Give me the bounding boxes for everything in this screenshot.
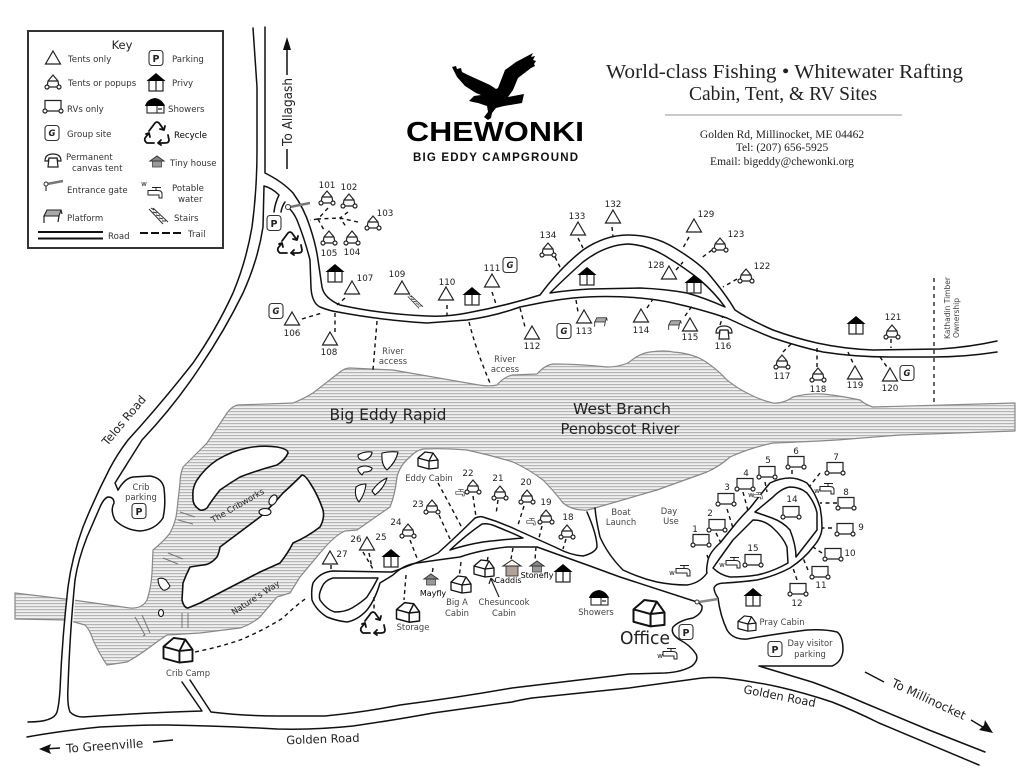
big A cabin bbox=[445, 562, 471, 618]
site 120: 120 bbox=[882, 384, 899, 394]
key: potable water: w bbox=[141, 180, 147, 188]
icon: recycle north bbox=[278, 232, 302, 255]
crib parking: Crib bbox=[133, 482, 149, 492]
caddis tiny house: Caddis bbox=[494, 576, 522, 585]
site 115: 115 bbox=[682, 333, 698, 343]
site 26 bbox=[350, 535, 374, 569]
key: stairs bbox=[149, 208, 199, 224]
site 112 bbox=[520, 308, 540, 352]
big A cabin: Big A bbox=[446, 597, 468, 607]
road label: Telos Road: Telos Road bbox=[98, 393, 149, 449]
chesuncook cabin: Cabin bbox=[492, 608, 516, 618]
site 10 bbox=[813, 547, 856, 561]
site 128 bbox=[648, 261, 683, 279]
key: platform: Platform bbox=[67, 214, 103, 224]
site 119: 119 bbox=[847, 381, 863, 391]
site 109: 109 bbox=[389, 270, 405, 280]
site 27 bbox=[322, 550, 348, 569]
site 6: 6 bbox=[793, 447, 799, 457]
chesuncook cabin: Chesuncook bbox=[478, 597, 530, 607]
day visitor parking: parking bbox=[794, 649, 826, 659]
site 4: 4 bbox=[743, 469, 749, 479]
site 6 bbox=[786, 447, 806, 477]
key: privy: Privy bbox=[172, 79, 193, 89]
privy loop east bbox=[684, 275, 704, 293]
arrow: to Millinocket bbox=[865, 672, 993, 733]
site 103: 103 bbox=[377, 209, 393, 219]
trail: river access west: River bbox=[382, 346, 404, 356]
campground name: BIG EDDY CAMPGROUND bbox=[413, 152, 578, 164]
site 110: 110 bbox=[439, 278, 456, 288]
site 5 bbox=[757, 456, 777, 492]
arrow: to Greenville: To Greenville bbox=[65, 736, 144, 756]
road label: Golden Road west: Golden Road bbox=[286, 731, 360, 747]
key: stairs: Stairs bbox=[174, 214, 199, 224]
key: RVs only bbox=[43, 100, 104, 115]
heading: tagline: Cabin, Tent, & RV Sites bbox=[689, 84, 877, 105]
site 134: 134 bbox=[540, 231, 557, 241]
crib parking bbox=[125, 482, 157, 518]
site 123: 123 bbox=[728, 230, 744, 240]
site 20 bbox=[518, 478, 535, 525]
contact details: Tel: (207) 656-5925 bbox=[736, 142, 828, 154]
eddy cabin: Eddy Cabin bbox=[405, 473, 453, 483]
mayfly tiny house bbox=[420, 568, 446, 598]
trail: river access west bbox=[373, 321, 407, 370]
arrow: to Allagash: To Allagash bbox=[281, 78, 296, 147]
key: road bbox=[38, 232, 130, 242]
day visitor parking: Day visitor bbox=[787, 638, 833, 648]
privy office side bbox=[744, 588, 762, 606]
heading: tagline: World-class Fishing • Whitewater Rafting bbox=[606, 62, 963, 83]
label: day use bbox=[661, 506, 679, 526]
stonefly tiny house: Stonefly bbox=[521, 571, 554, 580]
site 19 bbox=[527, 498, 554, 538]
label: boat launch: Boat bbox=[611, 507, 631, 517]
site 134 bbox=[540, 231, 560, 267]
site 102: 102 bbox=[341, 183, 357, 193]
site 118: 118 bbox=[810, 385, 826, 395]
water taps east: w bbox=[669, 569, 675, 577]
site 114: 114 bbox=[633, 326, 650, 336]
key: tents only bbox=[46, 51, 111, 65]
site 22: 22 bbox=[462, 469, 474, 479]
site 107 bbox=[337, 274, 373, 305]
key: recycle bbox=[145, 122, 207, 145]
entrance gate and north parking bbox=[267, 203, 310, 230]
site 1: 1 bbox=[692, 525, 698, 535]
road label: Golden Road east: Golden Road bbox=[742, 682, 817, 710]
privy south bbox=[554, 564, 572, 582]
trail: river access east bbox=[469, 322, 519, 383]
site 7 bbox=[809, 453, 845, 487]
label: day use: Day bbox=[661, 506, 677, 516]
site 7: 7 bbox=[833, 453, 839, 463]
site 5: 5 bbox=[765, 456, 771, 466]
trail: river access east: access bbox=[491, 364, 519, 374]
island: The Cribworks bbox=[193, 446, 288, 510]
key: entrance gate bbox=[44, 181, 128, 196]
site 122 bbox=[723, 262, 770, 287]
site 107: 107 bbox=[357, 274, 373, 284]
site 129: 129 bbox=[698, 210, 714, 220]
site 106: G bbox=[273, 307, 280, 317]
trail: river access east: River bbox=[494, 354, 516, 364]
site 122: 122 bbox=[754, 262, 770, 272]
eddy cabin bbox=[405, 452, 462, 528]
storage: Storage bbox=[397, 622, 429, 632]
site 21: 21 bbox=[492, 474, 504, 484]
site 113: G bbox=[561, 327, 568, 337]
key: entrance gate: Entrance gate bbox=[67, 186, 128, 196]
site 8: 8 bbox=[843, 488, 849, 498]
site 2 bbox=[707, 509, 727, 543]
privy north 1 bbox=[326, 264, 344, 282]
key: parking bbox=[149, 50, 204, 66]
crib camp: Crib Camp bbox=[166, 668, 210, 678]
site cluster 101-105 bbox=[310, 181, 393, 259]
key: tents or popups bbox=[45, 75, 137, 89]
rapids ripples bbox=[135, 512, 195, 636]
site 132 bbox=[605, 200, 621, 237]
entrance gate and north parking: P bbox=[271, 219, 278, 230]
water taps east: w bbox=[748, 491, 754, 499]
site 20: 20 bbox=[520, 478, 532, 488]
key: group site: G bbox=[49, 129, 56, 139]
site 14: 14 bbox=[786, 495, 798, 505]
site 120: G bbox=[904, 369, 911, 379]
site 11 bbox=[803, 558, 830, 591]
key: showers: Showers bbox=[168, 105, 205, 115]
site 1 bbox=[691, 525, 711, 558]
day visitor parking bbox=[768, 638, 833, 659]
heading: tagline bbox=[606, 62, 963, 105]
site 113: 113 bbox=[576, 327, 592, 337]
key: potable water: Potable bbox=[172, 184, 204, 194]
site 133: 133 bbox=[569, 212, 585, 222]
site 132: 132 bbox=[605, 200, 621, 210]
icon: eagle bbox=[452, 53, 536, 120]
site 101: 101 bbox=[319, 181, 335, 191]
site 110 bbox=[438, 278, 456, 315]
key: group site: Group site bbox=[67, 130, 111, 140]
site 129 bbox=[683, 210, 714, 248]
label: Kathadin Timber Ownership with boundary: Kathadin Timber bbox=[943, 276, 952, 339]
site 119 bbox=[847, 352, 863, 391]
label: boat launch: Launch bbox=[606, 517, 636, 527]
site 9 bbox=[822, 523, 864, 536]
key: trail: Trail bbox=[187, 230, 206, 240]
key: parking: Parking bbox=[172, 55, 204, 65]
arrow: to Millinocket: To Millinocket bbox=[888, 676, 968, 723]
site 10: 10 bbox=[844, 549, 856, 559]
island: Nature's Way bbox=[182, 475, 324, 608]
site 117: 117 bbox=[774, 372, 790, 382]
site 111: 111 bbox=[484, 264, 500, 274]
key: showers bbox=[145, 98, 205, 115]
crib camp bbox=[164, 597, 308, 678]
small river islands bbox=[158, 452, 398, 616]
site 25 bbox=[369, 533, 400, 568]
label: day use: Use bbox=[663, 516, 679, 526]
site 18: 18 bbox=[562, 513, 574, 523]
showers: Showers bbox=[578, 607, 614, 617]
key heading: Key bbox=[112, 38, 133, 52]
site 24: 24 bbox=[390, 518, 402, 528]
site 15 bbox=[743, 544, 763, 567]
site 114 bbox=[633, 299, 653, 336]
site 105: 105 bbox=[321, 249, 337, 259]
contact details: Email: bigeddy@chewonki.org bbox=[710, 156, 854, 168]
site 111: G bbox=[507, 261, 514, 271]
showers bbox=[578, 590, 614, 617]
logo: Chewonki eagle and wordmark bbox=[406, 53, 584, 164]
water taps east: w bbox=[719, 561, 725, 569]
river label: West Branch Penobscot River: West Branch bbox=[573, 400, 671, 418]
key: trail bbox=[140, 230, 206, 240]
site 106 bbox=[269, 304, 322, 339]
site 113 bbox=[557, 300, 607, 338]
key: tents or popups: Tents or popups bbox=[67, 79, 137, 89]
site 15: 15 bbox=[747, 544, 759, 554]
label: The Cribworks: The Cribworks bbox=[208, 486, 266, 525]
privy north 2 bbox=[462, 287, 482, 305]
site 111 bbox=[484, 258, 517, 307]
key: tiny house bbox=[150, 156, 217, 169]
south entrance gate bbox=[695, 599, 718, 604]
trail: river access west: access bbox=[379, 356, 407, 366]
site 128: 128 bbox=[648, 261, 664, 271]
site 23 bbox=[412, 500, 450, 539]
site 104: 104 bbox=[344, 248, 361, 258]
key: permanent canvas tent: Permanent bbox=[66, 153, 113, 163]
contact details: Golden Rd, Millinocket, ME 04462 bbox=[700, 129, 864, 141]
site 108 bbox=[321, 313, 338, 358]
site 117 bbox=[774, 343, 792, 382]
site 23: 23 bbox=[412, 500, 424, 510]
office: P bbox=[683, 628, 690, 639]
key: group site bbox=[45, 126, 111, 140]
site 9: 9 bbox=[858, 523, 864, 533]
key: parking: P bbox=[153, 54, 160, 65]
site 118 bbox=[810, 348, 826, 395]
site 26: 26 bbox=[350, 535, 362, 545]
key: tents only: Tents only bbox=[67, 55, 111, 65]
big A cabin: Cabin bbox=[445, 608, 469, 618]
label: Kathadin Timber Ownership with boundary: Ownership bbox=[952, 298, 961, 338]
storage bbox=[396, 575, 429, 632]
site 116: 116 bbox=[715, 342, 732, 352]
site 12 bbox=[788, 568, 808, 609]
site 112: 112 bbox=[524, 342, 540, 352]
arrow: to Greenville bbox=[39, 736, 173, 756]
water taps east bbox=[669, 484, 834, 577]
office: Office bbox=[620, 629, 670, 649]
site 121 bbox=[884, 313, 901, 348]
key panel bbox=[28, 31, 223, 248]
office bbox=[620, 600, 693, 660]
site 108: 108 bbox=[321, 348, 337, 358]
key: permanent canvas tent bbox=[45, 153, 123, 174]
site 2: 2 bbox=[707, 509, 713, 519]
key: RVs only: RVs only bbox=[67, 105, 104, 115]
site 133 bbox=[569, 212, 586, 248]
site 21 bbox=[492, 474, 508, 514]
wordmark: CHEWONKI bbox=[406, 116, 584, 147]
key: permanent canvas tent: canvas tent bbox=[72, 164, 123, 174]
privy loop west bbox=[578, 267, 596, 285]
site 22 bbox=[456, 469, 481, 517]
caddis tiny house bbox=[494, 548, 522, 585]
key: privy bbox=[146, 73, 193, 91]
site 27: 27 bbox=[336, 550, 348, 560]
icon: recycle south bbox=[361, 597, 385, 635]
mayfly tiny house: Mayfly bbox=[420, 589, 446, 598]
site 24 bbox=[390, 518, 417, 558]
chesuncook cabin bbox=[474, 557, 530, 618]
site 11: 11 bbox=[815, 581, 827, 591]
river label: West Branch Penobscot River: Penobscot River bbox=[560, 420, 680, 438]
river label: West Branch Penobscot River bbox=[560, 400, 680, 438]
key: road: Road bbox=[108, 232, 130, 242]
pray cabin: Pray Cabin bbox=[759, 617, 805, 627]
label: Kathadin Timber Ownership with boundary bbox=[934, 276, 961, 402]
site 115 bbox=[669, 306, 698, 343]
privy east bbox=[846, 316, 866, 334]
key: platform bbox=[44, 210, 103, 224]
site 19: 19 bbox=[540, 498, 552, 508]
site 25: 25 bbox=[375, 533, 387, 543]
key: recycle: Recycle bbox=[174, 131, 207, 141]
river label: Big Eddy Rapid: Big Eddy Rapid bbox=[330, 405, 446, 424]
key: tiny house: Tiny house bbox=[169, 159, 217, 169]
site 121: 121 bbox=[885, 313, 901, 323]
arrow: to Allagash bbox=[281, 37, 296, 169]
site 109 bbox=[389, 270, 423, 308]
site 3: 3 bbox=[724, 483, 730, 493]
river: West Branch Penobscot bbox=[15, 351, 1015, 665]
site 123 bbox=[700, 230, 744, 259]
label: Nature's Way: Nature's Way bbox=[229, 578, 281, 617]
site 4 bbox=[735, 469, 755, 511]
site 120 bbox=[880, 357, 914, 394]
label: boat launch bbox=[606, 507, 636, 527]
key: potable water: water bbox=[178, 195, 203, 205]
crib parking: P bbox=[136, 507, 143, 518]
contact details bbox=[700, 129, 864, 168]
office: w bbox=[657, 652, 663, 660]
site 18 bbox=[559, 513, 575, 549]
site 106: 106 bbox=[284, 329, 301, 339]
key: potable water bbox=[141, 180, 204, 205]
site 12: 12 bbox=[791, 599, 803, 609]
site 8 bbox=[820, 488, 856, 510]
pray cabin bbox=[738, 616, 805, 631]
stonefly tiny house bbox=[521, 547, 554, 580]
site 116 bbox=[715, 316, 732, 352]
site 14 bbox=[781, 495, 801, 519]
site 3 bbox=[716, 483, 736, 528]
crib parking: parking bbox=[125, 492, 157, 502]
day visitor parking: P bbox=[772, 645, 779, 656]
water taps east: w bbox=[814, 487, 820, 495]
